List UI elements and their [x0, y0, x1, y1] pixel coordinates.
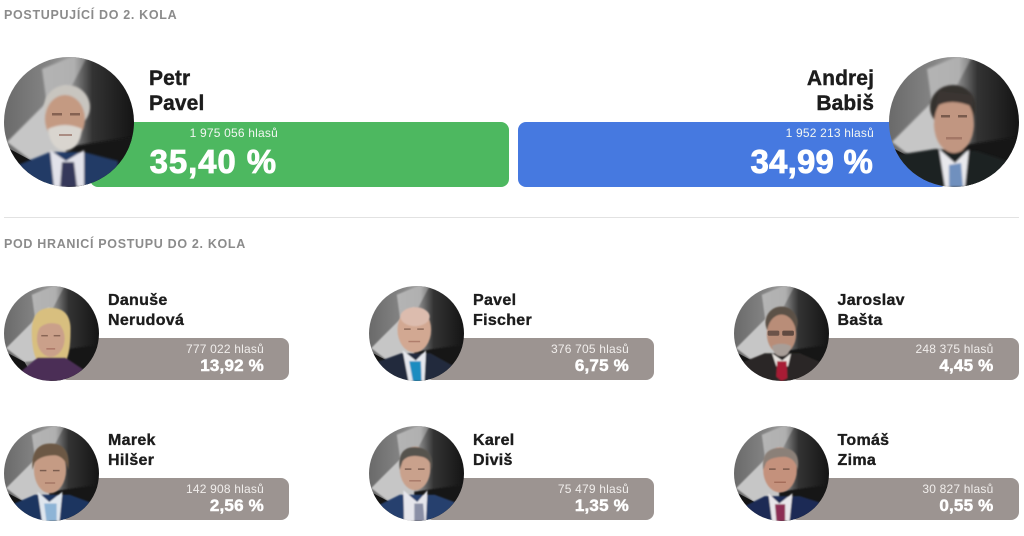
percentage: Babiš: 34,99 %: [750, 143, 873, 180]
name: Danuše Nerudová: Danuše: [108, 292, 168, 309]
bar: Diviš result: [425, 478, 654, 520]
name: Andrej Babiš: Andrej: [807, 66, 874, 90]
name: Tomáš Zima: Zima: [838, 452, 876, 469]
percentage: Fischer: 6,75 %: [575, 356, 629, 374]
portrait: Danuše Nerudová: [4, 286, 99, 381]
name: Andrej Babiš: [807, 66, 874, 114]
candidate: Pavel Fischer: [369, 286, 654, 381]
bar: Zima result: [790, 478, 1018, 520]
candidate: Jaroslav Bašta: [734, 286, 1019, 381]
name: Marek Hilšer: Hilšer: [108, 452, 154, 469]
vote count: Fischer: 376 705 hlasů: [551, 342, 629, 356]
name: Petr Pavel: Pavel: [149, 92, 204, 114]
candidate: Karel Diviš: [369, 426, 654, 521]
bar: Nerudová result: [60, 338, 289, 380]
name: Karel Diviš: Diviš: [473, 452, 513, 469]
candidate: Marek Hilšer: [4, 426, 289, 521]
portrait: Tomáš Zima: [734, 426, 829, 521]
name: Jaroslav Bašta: Bašta: [838, 312, 883, 329]
candidate: Tomáš Zima: [734, 426, 1019, 521]
name: Petr Pavel: [149, 66, 204, 114]
name: Petr Pavel: Petr: [149, 66, 190, 90]
name: Danuše Nerudová: Nerudová: [108, 312, 184, 329]
heading: advancing candidates: POSTUPUJÍCÍ DO 2. KOLA: [4, 8, 177, 22]
candidate: Petr Pavel: [4, 57, 509, 187]
name: Karel Diviš: [473, 432, 515, 469]
heading: candidates below the threshold: POD HRANICÍ POSTUPU DO 2. KOLA: [4, 237, 246, 251]
percentage: Bašta: 4,45 %: [939, 356, 994, 374]
name: Andrej Babiš: Babiš: [816, 92, 874, 114]
percentage: Hilšer: 2,56 %: [210, 496, 264, 514]
portrait: Petr Pavel: [4, 57, 134, 187]
name: Tomáš Zima: Tomáš: [838, 432, 889, 449]
name: Tomáš Zima: [838, 432, 889, 469]
vote count: Babiš: 1 952 213 hlasů: [786, 126, 874, 140]
candidate: Danuše Nerudová: [4, 286, 289, 381]
portrait: Marek Hilšer: [4, 426, 99, 521]
bar: Hilšer result: [60, 478, 289, 520]
name: Marek Hilšer: [108, 432, 156, 469]
vote count: Diviš: 75 479 hlasů: [558, 482, 629, 496]
vote count: Zima: 30 827 hlasů: [922, 482, 994, 496]
bar: Pavel result: [90, 122, 509, 186]
bar: Babiš result: [518, 122, 948, 186]
percentage: Diviš: 1,35 %: [575, 496, 629, 514]
vote count: Pavel: 1 975 056 hlasů: [190, 126, 278, 140]
name: Pavel Fischer: [473, 292, 532, 329]
bar: Bašta result: [790, 338, 1018, 380]
vote count: Nerudová: 777 022 hlasů: [186, 342, 264, 356]
vote count: Hilšer: 142 908 hlasů: [186, 482, 264, 496]
portrait: Pavel Fischer: [369, 286, 464, 381]
portrait: Jaroslav Bašta: [734, 286, 829, 381]
vote count: Bašta: 248 375 hlasů: [916, 342, 994, 356]
name: Jaroslav Bašta: [838, 292, 905, 329]
bar: Fischer result: [425, 338, 654, 380]
name: Jaroslav Bašta: Jaroslav: [838, 292, 905, 309]
candidate: Andrej Babiš: [518, 57, 1019, 187]
name: Pavel Fischer: Pavel: [473, 292, 516, 309]
name: Pavel Fischer: Fischer: [473, 312, 532, 329]
percentage: Pavel: 35,40 %: [150, 143, 277, 180]
name: Danuše Nerudová: [108, 292, 184, 329]
portrait: Andrej Babiš: [889, 57, 1019, 187]
portrait: Karel Diviš: [369, 426, 464, 521]
percentage: Nerudová: 13,92 %: [200, 356, 264, 374]
name: Karel Diviš: Karel: [473, 432, 515, 449]
percentage: Zima: 0,55 %: [939, 496, 994, 514]
name: Marek Hilšer: Marek: [108, 432, 156, 449]
